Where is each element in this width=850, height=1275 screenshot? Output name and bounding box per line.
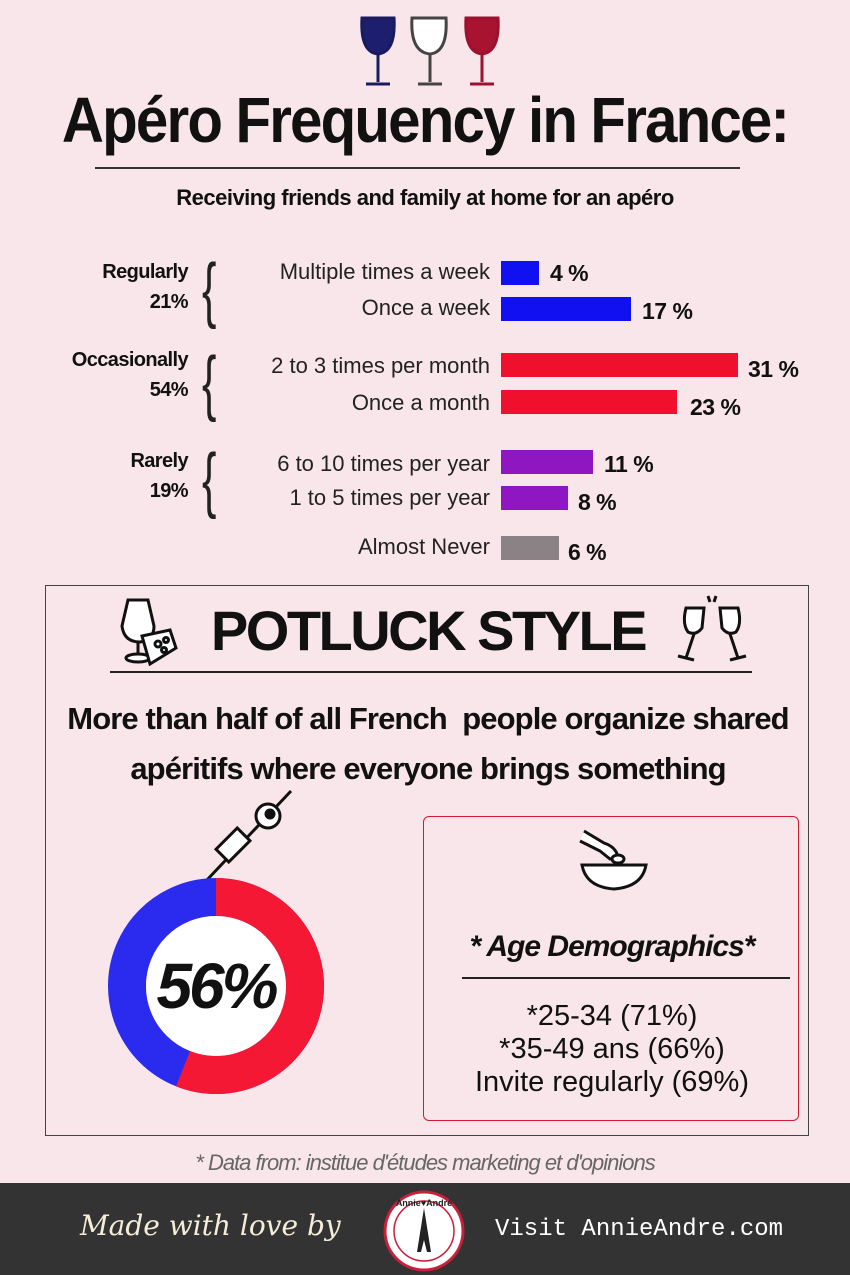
group: regularly: 21% xyxy=(150,291,188,313)
text: age stats: Invite regularly (69%) xyxy=(475,1066,749,1098)
bar chart: frequency: 2 to 3 times per month xyxy=(271,353,490,378)
group: rarely: Rarely xyxy=(130,450,188,472)
donut chart: 56%: 56% xyxy=(156,950,278,1022)
group: rarely: 19% xyxy=(150,480,188,502)
text: age stats xyxy=(475,1000,749,1098)
bar chart: frequency: 4 % xyxy=(550,260,588,286)
bar chart: frequency: 6 % xyxy=(568,539,606,565)
icon: wine glasses xyxy=(360,16,500,86)
group: regularly xyxy=(102,261,188,313)
bar chart: frequency: 17 % xyxy=(642,298,692,324)
bar chart: frequency: 6 to 10 times per year xyxy=(277,451,490,476)
panel: potluck style xyxy=(45,585,809,1136)
text: potluck statement: More than half of all French people organize shared xyxy=(67,701,789,736)
group: rarely xyxy=(130,450,188,502)
bar chart: frequency: Almost Never xyxy=(358,534,490,559)
panel: age demographics xyxy=(423,816,799,1121)
icon: glass and cheese xyxy=(120,598,178,666)
logo: Annie♥André xyxy=(396,1198,452,1208)
bar chart: frequency: { xyxy=(202,440,216,520)
bar chart: frequency: { xyxy=(202,250,216,330)
text: potluck statement: apéritifs where everyone brings something xyxy=(130,751,726,786)
heading: age demographics: * Age Demographics* xyxy=(470,930,754,963)
icon: clinking glasses xyxy=(678,596,746,662)
icon: skewer xyxy=(206,790,292,878)
footer: made with love: Made with love by xyxy=(80,1209,341,1242)
subtitle: Receiving friends and family at home for an apéro xyxy=(176,185,674,210)
bar chart: frequency: Once a month xyxy=(352,390,490,415)
title: Apéro Frequency in France: xyxy=(62,84,788,156)
bar chart: frequency: Once a week xyxy=(362,295,490,320)
icon: hand dipping bowl xyxy=(579,830,648,890)
group: occasionally: Occasionally xyxy=(72,349,188,371)
group: regularly: Regularly xyxy=(102,261,188,283)
footer xyxy=(0,1183,850,1275)
source note: * Data from: institue d'études marketing et d'opinions xyxy=(195,1150,655,1175)
heading: potluck style: POTLUCK STYLE xyxy=(211,599,645,662)
text: age stats: *35-49 ans (66%) xyxy=(499,1033,725,1065)
bar chart: frequency: 31 % xyxy=(748,356,798,382)
group: occasionally xyxy=(72,349,188,401)
bar chart: frequency: { xyxy=(202,343,216,423)
bar chart: frequency: 23 % xyxy=(690,394,740,420)
donut chart: 56% xyxy=(108,878,324,1094)
bar chart: frequency: 11 % xyxy=(604,451,653,477)
bar chart: frequency xyxy=(72,250,798,565)
bar chart: frequency: 1 to 5 times per year xyxy=(289,485,490,510)
group: occasionally: 54% xyxy=(150,379,188,401)
bar chart: frequency: Multiple times a week xyxy=(280,259,490,284)
bar chart: frequency: 8 % xyxy=(578,489,616,515)
logo xyxy=(384,1190,464,1272)
text: potluck statement xyxy=(67,701,789,786)
footer: visit link: Visit AnnieAndre.com xyxy=(495,1216,783,1243)
text: age stats: *25-34 (71%) xyxy=(527,1000,697,1032)
